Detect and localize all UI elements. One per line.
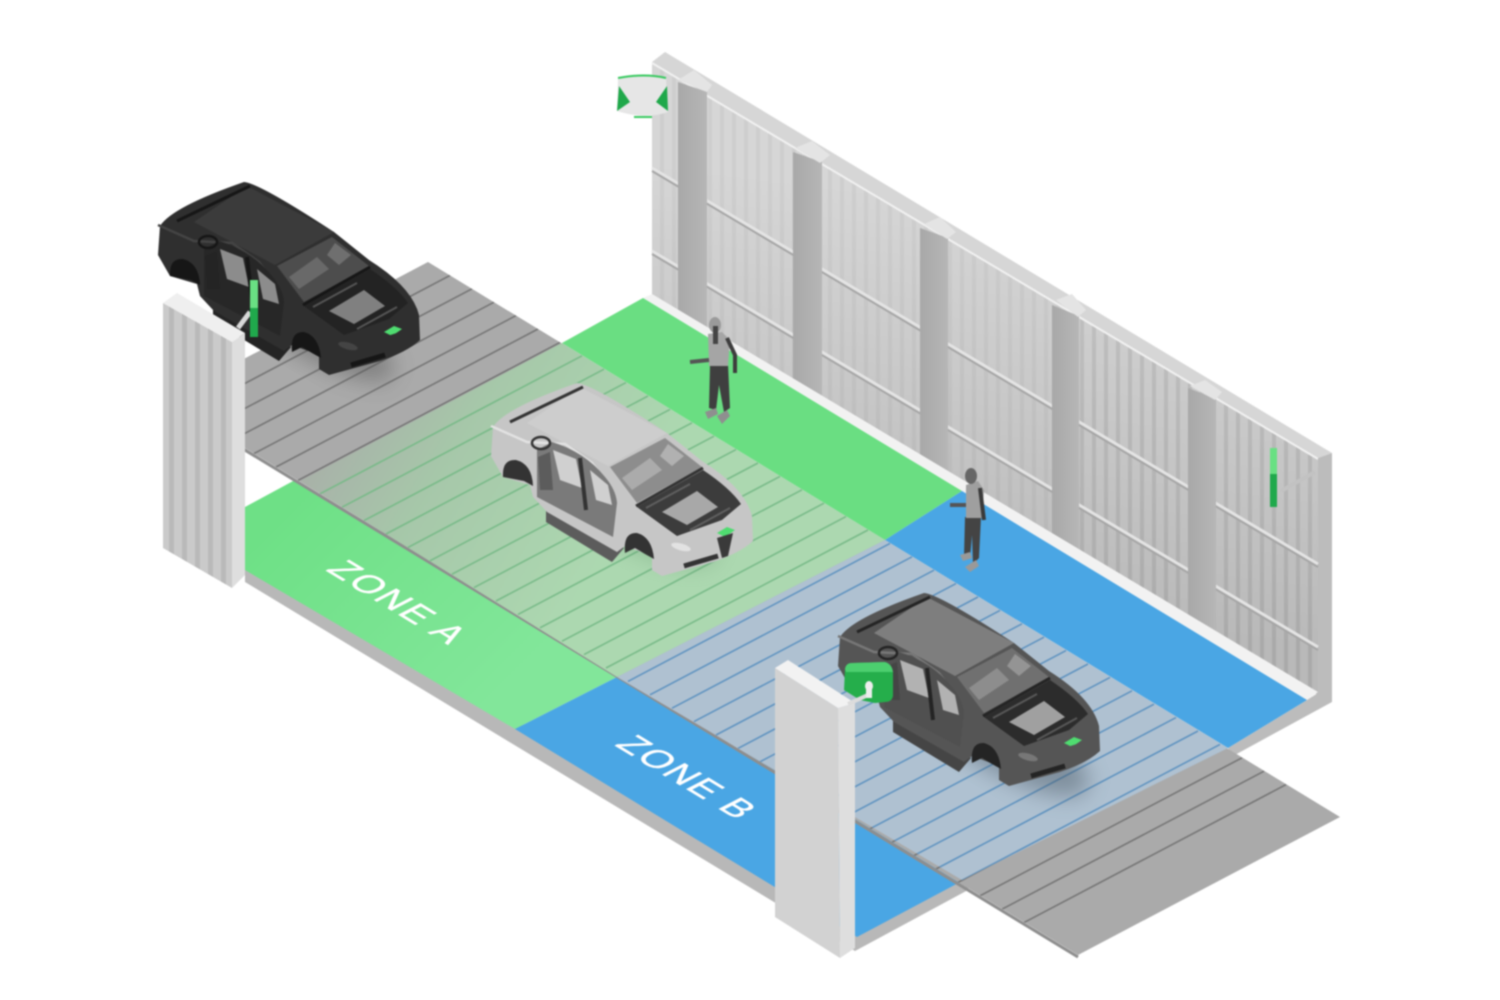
floor side edge right	[1228, 693, 1332, 756]
zone B floor	[515, 677, 962, 937]
worker 2	[950, 468, 984, 572]
worker 1	[690, 317, 735, 424]
wall column 5	[1188, 380, 1222, 635]
car body centre (light)	[491, 383, 753, 589]
zone A upper floor	[562, 298, 962, 540]
wall column 2	[793, 141, 830, 397]
left gate pillar	[163, 293, 245, 588]
back wall	[652, 52, 1332, 702]
floor base strip along wall	[643, 294, 1318, 700]
icon: green scanner bar on left pillar	[238, 280, 258, 337]
isometric factory scene	[156, 52, 1340, 959]
zone A label: ZONE A	[318, 555, 477, 649]
car body top left (dark)	[158, 182, 420, 401]
blue overlay on conveyor	[617, 540, 1228, 880]
icon: wall-mounted scanner top left	[617, 76, 668, 117]
zone B upper floor	[885, 491, 1307, 748]
wall column 1	[678, 70, 712, 330]
green overlay on conveyor	[308, 343, 884, 678]
zone B label: ZONE B	[607, 730, 766, 824]
car body bottom right (mid grey)	[838, 593, 1105, 818]
wall column 4	[1052, 294, 1086, 552]
wall column 3	[920, 217, 956, 473]
icon: green scanner bar on right wall	[1270, 448, 1315, 507]
icon: green scanner panel on front pillar	[844, 662, 893, 704]
zone A floor	[245, 480, 617, 729]
front gate pillar	[775, 660, 855, 958]
floor side edge left	[245, 560, 970, 951]
conveyor platform	[166, 262, 1340, 957]
